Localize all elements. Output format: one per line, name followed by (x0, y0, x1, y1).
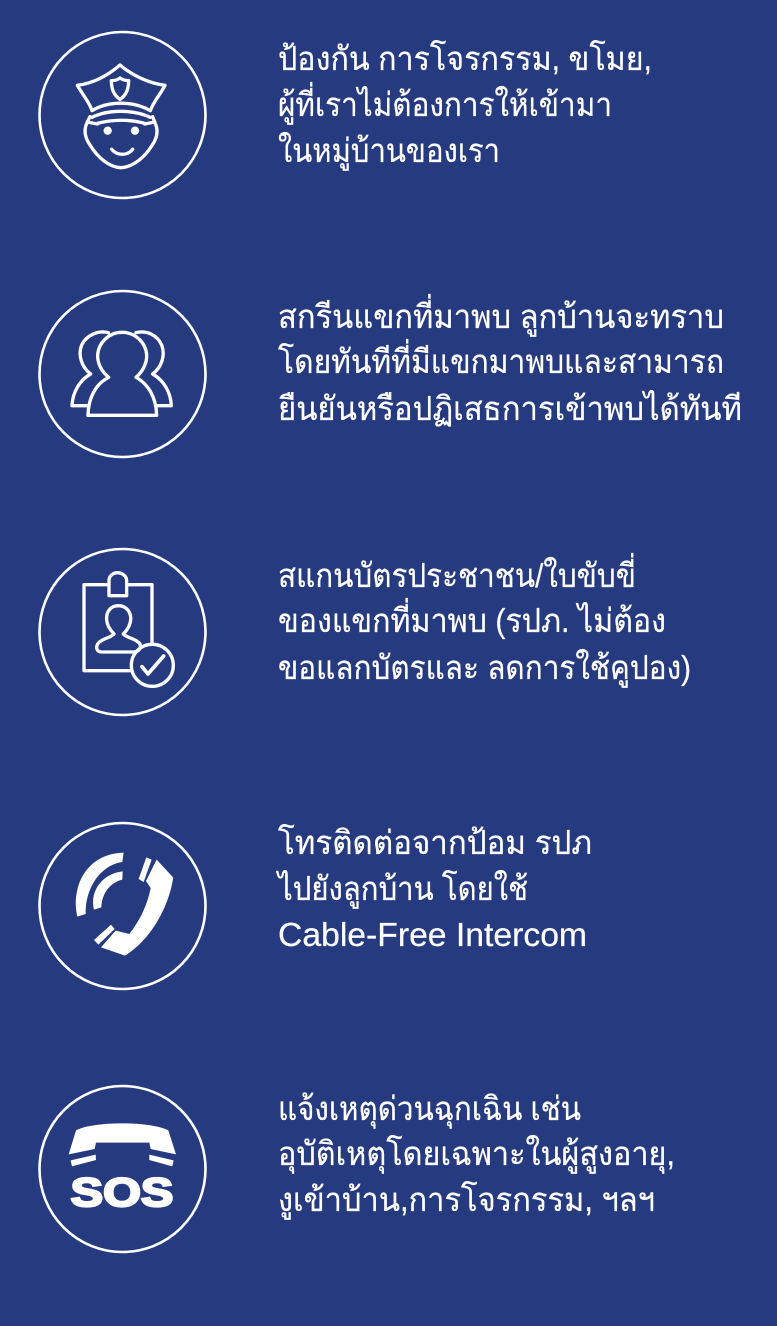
text: intercom: Cable-Free Intercom (278, 916, 587, 953)
icon: police officer (40, 32, 206, 198)
icon: visitors group (40, 291, 206, 457)
text: intercom (275, 824, 592, 953)
text: prevention (278, 40, 652, 171)
icon: SOS telephone: SOS (71, 1171, 173, 1215)
text: emergency: งูเข้าบ้าน,การโจรกรรม, ฯลฯ (278, 1181, 655, 1220)
text: emergency: แจ้งเหตุด่วนฉุกเฉิน เช่น (278, 1090, 581, 1129)
text: ID scanning: สแกนบัตรประชาชน/ใบขับขี่ (278, 553, 636, 594)
text: ID scanning (278, 553, 691, 688)
text: emergency: อุบัติเหตุโดยเฉพาะในผู้สูงอายุ, (278, 1135, 675, 1174)
icon: telephone handset with signal (40, 823, 206, 989)
text: intercom: โทรติดต่อจากป้อม รปภ (278, 824, 592, 861)
text: visitor screening (278, 294, 742, 427)
text: intercom: ไปยังลูกบ้าน โดยใช้ (275, 870, 528, 909)
text: ID scanning: ขอแลกบัตรและ ลดการใช้คูปอง) (278, 649, 691, 688)
icon: SOS telephone (40, 1086, 206, 1252)
text: prevention: ป้องกัน การโจรกรรม, ขโมย, (278, 40, 652, 77)
text: prevention: ผู้ที่เราไม่ต้องการให้เข้ามา (278, 82, 612, 125)
text: visitor screening: สกรีนแขกที่มาพบ ลูกบ้านจะทราบ (278, 294, 724, 337)
text: prevention: ในหมู่บ้านของเรา (278, 132, 500, 171)
text: visitor screening: โดยทันทีที่มีแขกมาพบและสามารถ (278, 339, 724, 380)
icon: ID card check (40, 549, 206, 715)
text: ID scanning: ของแขกที่มาพบ (รปภ. ไม่ต้อง (278, 598, 666, 639)
text: emergency (278, 1090, 675, 1220)
text: visitor screening: ยืนยันหรือปฏิเสธการเข้าพบได้ทันที (278, 390, 742, 427)
